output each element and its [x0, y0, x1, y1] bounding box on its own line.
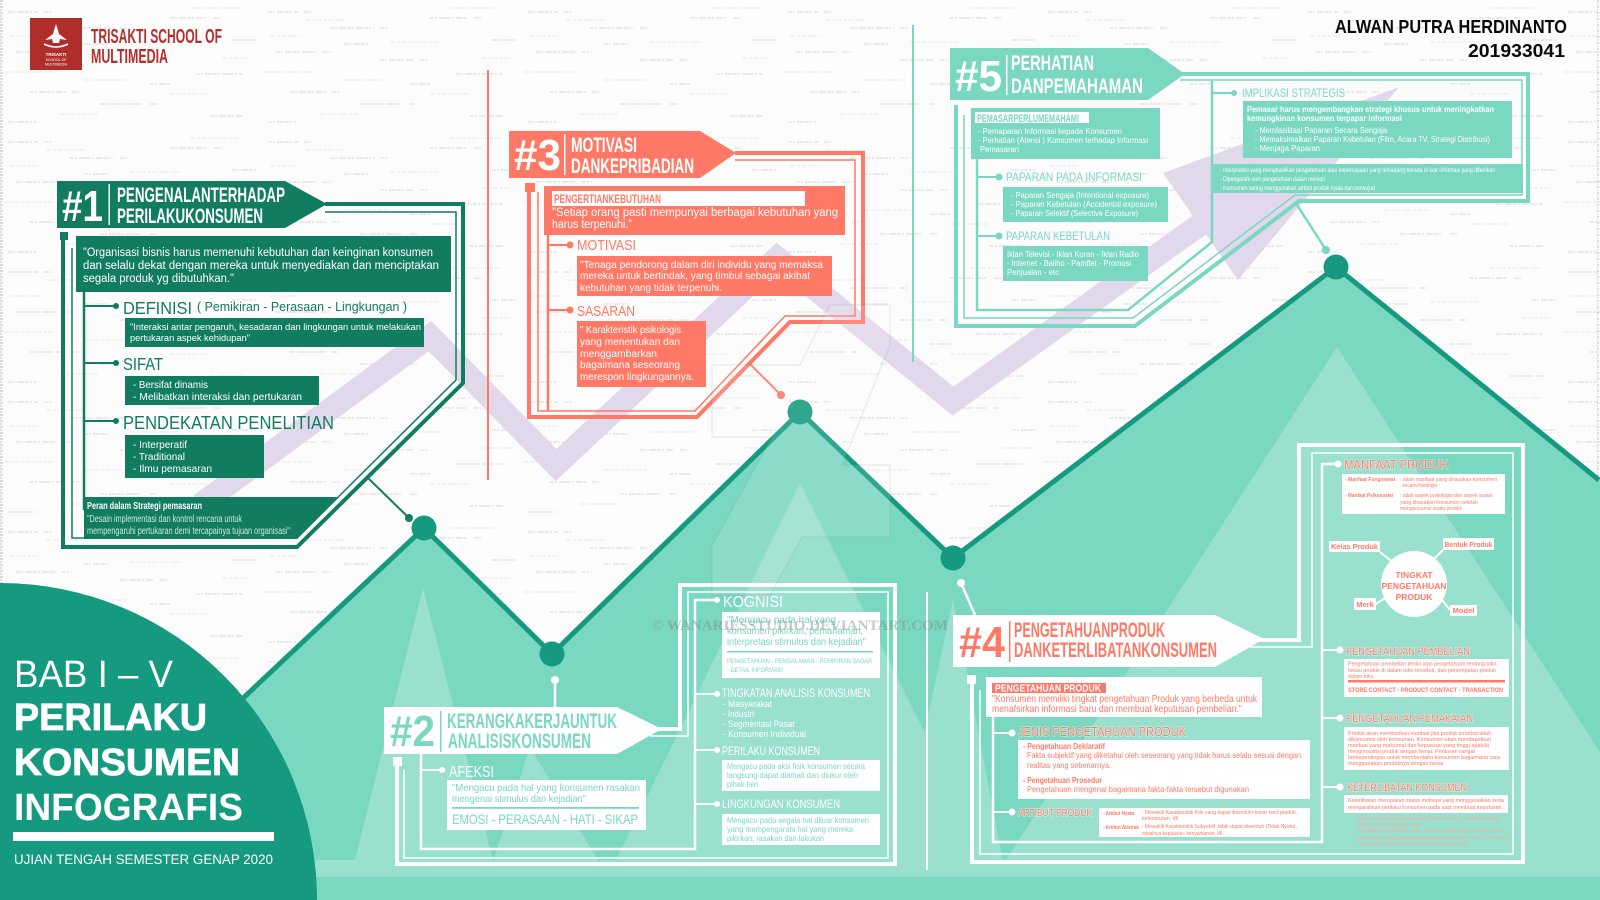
panel 1: pengenalan: [57, 181, 463, 547]
sifat: SIFAT: [123, 354, 163, 374]
watermark text: © WANARIESSTUDIO.DEVIANTART.COM: [652, 618, 948, 634]
interpretasi box: - Konsumen sering menggunakan atribut produk nyata dan berwujud: [1220, 186, 1375, 192]
connector 3: [750, 364, 785, 399]
perilaku konsumen: PERILAKU KONSUMEN: [722, 746, 820, 758]
sasaran: menggambarkan: [580, 348, 657, 360]
interpretasi box: - Interpretasi yang menghasilkan pengetahuan atau kepercayaan yang terkadang berada di luar informasi yang diberikan: [1220, 168, 1495, 174]
kebutuhan box: [544, 186, 845, 235]
banner 5: [950, 48, 1185, 101]
tingkatan analisis: - Konsumen Individual: [723, 729, 806, 740]
node 4: [940, 546, 966, 570]
kognisi: interpretasi stimulus dan kejadian": [727, 637, 866, 648]
keterlibatan konsumen: bentuk kebutuhan dan nilai.: [1357, 822, 1421, 828]
manfaat produk: [1334, 457, 1505, 514]
pemasar box: Pemasaran: [980, 145, 1019, 154]
logo: TRISAKTI: [46, 52, 66, 57]
title panel: [0, 583, 317, 900]
banner 4: [953, 615, 1264, 667]
banner 5: PERHATIAN: [1011, 52, 1094, 75]
paparan pada informasi: - Paparan Kebetulan (Accidental exposure): [1011, 200, 1157, 209]
keterlibatan konsumen: mengarahkan perilaku konsumen pada saat membuat keputusan.: [1348, 805, 1503, 811]
manfaat produk: : ialah manfaat yang dirasakan konsumen: [1400, 477, 1497, 483]
author: 201933041: [1468, 41, 1565, 61]
divider: white: [926, 592, 928, 870]
artibut produk: misalnya kepuasan, kenyamanan, dll: [1142, 831, 1222, 837]
banner 1: #1: [62, 182, 103, 231]
keterlibatan konsumen: [1322, 782, 1510, 847]
pemasar box: - Pemaparan Informasi kepada Konsumen: [978, 127, 1122, 136]
kebutuhan box: PENGERTIANKEBUTUHAN: [554, 192, 661, 206]
paparan kebetulan: - Internet - Baliho - Pamflet - Promosi: [1007, 259, 1131, 268]
perilaku konsumen: langsung dapat diamati dan diukur oleh: [727, 770, 858, 780]
perilaku konsumen: [695, 746, 880, 791]
pendekatan penelitian: - Traditional: [133, 451, 185, 463]
keterlibatan konsumen: Keterlibatan merupakan status motivasi yang menggerakkan serta: [1348, 798, 1505, 804]
afeksi: EMOSI - PERASAAN - HATI - SIKAP: [452, 811, 638, 827]
pengetahuan produk box: [986, 677, 1262, 717]
keterlibatan konsumen: KETERLIBATAN KONSUMEN: [1347, 782, 1467, 794]
sasaran: merespon lingkungannya.: [580, 371, 694, 383]
pengetahuan pemakaian: manfaat yang maksimal dan kepuasan yang tinggi apabila: [1348, 743, 1490, 749]
kognisi: KOGNISI: [723, 594, 783, 611]
pemasar box: - Perhatian (Atensi ) Konsumen terhadap Informasi: [978, 136, 1148, 145]
watermark logo: [712, 305, 890, 595]
afeksi: [421, 764, 646, 830]
paparan pada informasi: - Paparan Sengaja (Intentional exposure): [1011, 191, 1149, 200]
pengetahuan pembelian: lokasi produk di dalam toko tersebut, dan penempatan produk: [1348, 668, 1496, 674]
definisi: DEFINISI: [123, 298, 192, 318]
paparan kebetulan: PAPARAN KEBETULAN: [1006, 229, 1110, 243]
author: [1335, 17, 1567, 61]
panel 3: motivasi: [509, 131, 863, 417]
title panel: UJIAN TENGAH SEMESTER GENAP 2020: [14, 851, 273, 867]
kebutuhan box: harus terpenuhi.": [552, 219, 632, 231]
mountain range: [0, 267, 1600, 900]
pengetahuan pemakaian: [1322, 713, 1509, 770]
keterlibatan konsumen: Ketika konsumen memperoleh motivasi yang mendasari dalam: [1357, 816, 1500, 822]
title panel: KONSUMEN: [14, 742, 240, 784]
lingkungan konsumen: Mengacu pada segala hal diluar konsumen: [727, 815, 869, 825]
pendekatan penelitian: - Interperatif: [133, 439, 187, 451]
connector 5: [1297, 205, 1330, 254]
lingkungan konsumen: LINGKUNGAN KONSUMEN: [722, 799, 840, 811]
motivasi: kebutuhan yang tidak terpenuhi.: [580, 282, 722, 294]
node 3: [788, 400, 812, 424]
connector 2: [551, 676, 559, 707]
afeksi: AFEKSI: [449, 764, 494, 781]
keterlibatan konsumen: kebutuhan, tujuan dan nilai yang terasa penting.: [1357, 841, 1468, 847]
pengetahuan pemakaian: menggunakan produknya dengan benar.: [1348, 761, 1445, 767]
pengetahuan pembelian: STORE CONTACT - PRODUCT CONTACT - TRANSACTION: [1348, 687, 1503, 694]
kebutuhan box: "Setiap orang pasti mempunyai berbagai kebutuhan yang: [552, 207, 838, 219]
node 5: [1324, 254, 1348, 280]
panel 4: pengetahuan produk: [953, 445, 1523, 862]
node 2: [540, 642, 564, 666]
artibut produk: [993, 808, 1310, 837]
jenis pengetahuan: realitas yang sebenarnya.: [1027, 760, 1111, 770]
logo: [30, 18, 82, 70]
pengetahuan pemakaian: Produk akan memberikan manfaat jika produk tersebut telah: [1348, 731, 1491, 737]
artibut produk: : Mewakili Karakteristik Subyektif, tidak dapat diwentuh (Tidak Nyata),: [1142, 824, 1297, 830]
paparan pada informasi: - Paparan Selektif (Selective Exposure): [1011, 209, 1138, 218]
banner 2: ANALISISKONSUMEN: [448, 730, 591, 753]
pendekatan penelitian: PENDEKATAN PENELITIAN: [123, 413, 334, 433]
peran strategi: "Desain implementasi dan kontrol rencana untuk: [87, 514, 243, 525]
quote box: segala produk yg dibutuhkan.": [83, 273, 234, 285]
definisi: pertukaran aspek kehidupan": [130, 333, 250, 344]
sifat: [84, 354, 319, 405]
tingkat pengetahuan diagram: Merk: [1356, 600, 1375, 609]
jenis pengetahuan: [993, 725, 1310, 799]
jenis pengetahuan: - Pengetahuan Deklaratif: [1023, 741, 1105, 751]
sasaran: " Karakteristik psikologis: [580, 324, 681, 336]
pendekatan penelitian: - Ilmu pemasaran: [133, 463, 212, 475]
pengetahuan pemakaian: mengonsumsi produk dengan benar. Produsen sangat: [1348, 749, 1475, 755]
node 1: [412, 516, 436, 540]
kognisi: konsumen pikirkan, pemahaman,: [727, 626, 863, 637]
tingkatan analisis: - Masyarakat: [723, 699, 772, 710]
banner 1: PERILAKUKONSUMEN: [117, 205, 263, 228]
paparan kebetulan: Penjualan - etc: [1007, 268, 1059, 277]
interpretasi box: [1213, 164, 1523, 193]
artibut produk: kelembutan, dll: [1142, 816, 1178, 822]
manfaat produk: - Manfaat Fungsional: [1345, 477, 1395, 483]
definisi: "Interaksi antar pengaruh, kesadaran dan lingkungan untuk melakukan: [130, 322, 421, 333]
logo: MULTIMEDIA: [45, 62, 68, 66]
implikasi strategis: - Menjaga Paparan: [1255, 144, 1320, 153]
implikasi strategis: kemungkinan konsumen terpapar informasi: [1247, 114, 1402, 123]
kognisi: "Mengacu pada hal yang: [727, 615, 836, 626]
paparan kebetulan: Iklan Televisi - Iklan Koran - Iklan Radio: [1007, 250, 1140, 259]
afeksi: mengenai stimulus dan kejadian": [452, 793, 586, 805]
lingkungan konsumen: [695, 799, 880, 845]
banner 1: [57, 181, 327, 231]
tingkat pengetahuan diagram: PENGETAHUAN: [1381, 581, 1447, 591]
paparan pada informasi: PAPARAN PADA INFORMASI: [1006, 170, 1142, 184]
pengetahuan produk box: PENGETAHUAN PRODUK: [995, 682, 1101, 694]
banner 4: DANKETERLIBATANKONSUMEN: [1014, 639, 1217, 662]
lingkungan konsumen: yang mempengaruhi hal yang mereka: [727, 824, 853, 834]
pengetahuan pemakaian: dikonsumsi oleh konsumen. Konsumen akan mendapatkan: [1348, 737, 1491, 743]
artibut produk: - Artibut Nyata: [1103, 811, 1135, 817]
banner 3: #3: [514, 131, 561, 180]
implikasi strategis: IMPLIKASI STRATEGIS: [1242, 86, 1345, 100]
pengetahuan pembelian: dalam toko.: [1348, 674, 1375, 680]
artibut produk: : Mewakili Karakteristik fisik yang dapat diwentuh/ besar kecil produk,: [1142, 810, 1297, 816]
sifat: - Bersifat dinamis: [133, 379, 208, 391]
kognisi: - DETAIL INFORMASI: [727, 667, 783, 674]
manfaat produk: mengonsumsi suatu produk: [1400, 506, 1462, 512]
pemasar box: [971, 108, 1160, 159]
purple growth arrow: [200, 87, 1399, 505]
banner 2: KERANGKAKERJAUNTUK: [447, 710, 617, 733]
banner 2: [384, 707, 662, 756]
afeksi: "Mengacu pada hal yang konsumen rasakan: [452, 782, 640, 794]
keterlibatan konsumen: atau pesan dianggap dirasakan dapat membantu untuk memenuhi: [1357, 835, 1510, 841]
definisi: ( Pemikiran - Perasaan - Lingkungan ): [197, 300, 407, 314]
title panel: INFOGRAFIS: [14, 787, 243, 829]
divider: coral: [487, 70, 489, 480]
jenis pengetahuan: - Pengetahuan Prosedur: [1023, 775, 1103, 785]
quote box: [76, 236, 451, 292]
artibut produk: ARTIBUT PRODUK: [1018, 808, 1092, 819]
pengetahuan produk box: "Konsumen memiliki tingkat pengetahuan Produk yang berbeda untuk: [992, 694, 1258, 705]
tingkatan analisis: - Industri: [723, 709, 754, 720]
tingkat pengetahuan diagram: Bentuk Produk: [1444, 540, 1493, 549]
motivasi: "Tenaga pendorong dalam diri individu yang memaksa: [580, 259, 823, 271]
pengetahuan pemakaian: berkepentingan untuk memberitahu konsumen bagaimana cara: [1348, 755, 1501, 761]
tingkatan analisis: [695, 688, 870, 740]
keterlibatan konsumen: Kenaikan keterlibatan akan muncul ketika objek produk, jasa: [1357, 828, 1503, 834]
banner 3: MOTIVASI: [571, 134, 637, 157]
jenis pengetahuan: Fakta subjektif yang diketahui oleh seseorang yang tidak harus selalu sesuai dengan: [1027, 750, 1301, 760]
panel 5: perhatian: [950, 48, 1528, 326]
tingkat pengetahuan diagram: [1329, 538, 1494, 617]
manfaat produk: secara fisiologis: [1402, 483, 1437, 489]
implikasi strategis: - Memaksimalkan Paparan Kebetulan (Film, Acara TV, Strategi Distribusi): [1255, 135, 1490, 144]
manfaat produk: : ialah aspek psikologis dan aspek sosial: [1400, 493, 1492, 499]
perilaku konsumen: Mengacu pada aksi fisik konsumen secara: [727, 761, 865, 771]
tingkat pengetahuan diagram: Kelas Produk: [1331, 542, 1379, 551]
sasaran: SASARAN: [577, 304, 635, 320]
tingkatan analisis: TINGKATAN ANALISIS KONSUMEN: [722, 688, 870, 700]
pengetahuan pembelian: [1322, 646, 1509, 697]
connector 4: [957, 579, 975, 615]
pendekatan penelitian: [84, 413, 334, 478]
connector 1: [368, 478, 413, 522]
banner 4: #4: [959, 618, 1005, 667]
author: ALWAN PUTRA HERDINANTO: [1335, 17, 1567, 37]
definisi: [84, 298, 424, 347]
title panel: PERILAKU: [14, 697, 207, 739]
pemasar box: PEMASARPERLUMEMAHAMI: [977, 113, 1079, 125]
artibut produk: - Artibut Abstrak: [1103, 825, 1140, 831]
peran strategi: Peran dalam Strategi pemasaran: [87, 501, 202, 512]
perilaku konsumen: pihak lain: [727, 779, 758, 789]
banner 5: #5: [955, 52, 1002, 101]
pengetahuan pembelian: Pengetahuan pembelian terdiri atas pengetahuan tentang toko,: [1348, 662, 1498, 668]
jenis pengetahuan: Pengetahuan mengenal bagaimana fakta-fakta tersebut digunakan: [1027, 784, 1249, 794]
jenis pengetahuan: JENIS PENGETAHUAN PRODUK: [1018, 725, 1187, 739]
peran strategi: mempengaruhi pertukaran demi tercapainya tujuan organisasi": [87, 526, 290, 537]
interpretasi box: - Dipengaruhi oleh pengetahuan dalam memori: [1220, 177, 1325, 183]
peran strategi: [84, 497, 339, 539]
implikasi strategis: Pemasar harus mengembangkan strategi khusus untuk meningkatkan: [1247, 105, 1494, 114]
pengetahuan pembelian: PENGETAHUAN PEMBELIAN: [1346, 646, 1470, 658]
manfaat produk: MANFAAT PRODUK: [1344, 457, 1448, 472]
motivasi: mereka untuk bertindak, yang timbul sebagai akibat: [580, 270, 810, 282]
banner 3: [509, 131, 736, 180]
motivasi: [548, 238, 832, 296]
banner 4: PENGETAHUANPRODUK: [1014, 619, 1165, 642]
kognisi: PENGETAHUAN - PENGALAMAN - PEMIKIRAN SADAR: [727, 658, 872, 665]
manfaat produk: - Manfaat Psikososial: [1345, 493, 1393, 499]
quote box: dan selalu dekat dengan mereka untuk menyediakan dan menciptakan: [83, 260, 439, 272]
pengetahuan produk box: menafsirkan informasi baru dan membuat keputusan pembelian.": [992, 704, 1242, 715]
kognisi: [714, 594, 880, 678]
sasaran: yang menentukan dan: [580, 336, 680, 348]
tingkat pengetahuan diagram: TINGKAT: [1395, 570, 1433, 580]
banner 3: DANKEPRIBADIAN: [571, 155, 694, 178]
tingkatan analisis: - Segmentasi Pasar: [723, 719, 795, 730]
tingkat pengetahuan diagram: Model: [1453, 606, 1474, 615]
banner 2: #2: [390, 707, 435, 756]
school name: MULTIMEDIA: [91, 46, 168, 68]
school name: [91, 26, 222, 68]
banner 1: PENGENALANTERHADAP: [117, 184, 285, 207]
panel 2: kerangka kerja: [384, 585, 895, 864]
paparan kebetulan: [977, 229, 1148, 281]
motivasi: MOTIVASI: [577, 238, 636, 254]
sifat: - Melibatkan interaksi dan pertukaran: [133, 391, 302, 403]
logo: SCHOOL OF: [45, 58, 67, 62]
sasaran: [548, 304, 706, 387]
paparan pada informasi: [977, 170, 1168, 222]
tingkat pengetahuan diagram: PRODUK: [1396, 592, 1433, 602]
title panel: BAB I – V: [14, 654, 174, 696]
banner 5: DANPEMAHAMAN: [1011, 75, 1143, 98]
implikasi strategis: - Memfasilitasi Paparan Secara Sengaja: [1255, 126, 1387, 135]
divider: mint: [912, 25, 914, 362]
quote box: "Organisasi bisnis harus memenuhi kebutuhan dan keinginan konsumen: [83, 247, 433, 259]
sasaran: bagaimana seseorang: [580, 359, 680, 371]
school name: TRISAKTI SCHOOL OF: [91, 26, 222, 48]
lingkungan konsumen: pikirkan, rasakan dan lakukan: [727, 833, 824, 843]
pengetahuan pemakaian: PENGETAHUAN PEMAKAIAN: [1346, 713, 1473, 725]
manfaat produk: yang dirasakan konsumen setelah: [1400, 500, 1478, 506]
implikasi strategis: [1212, 86, 1512, 158]
